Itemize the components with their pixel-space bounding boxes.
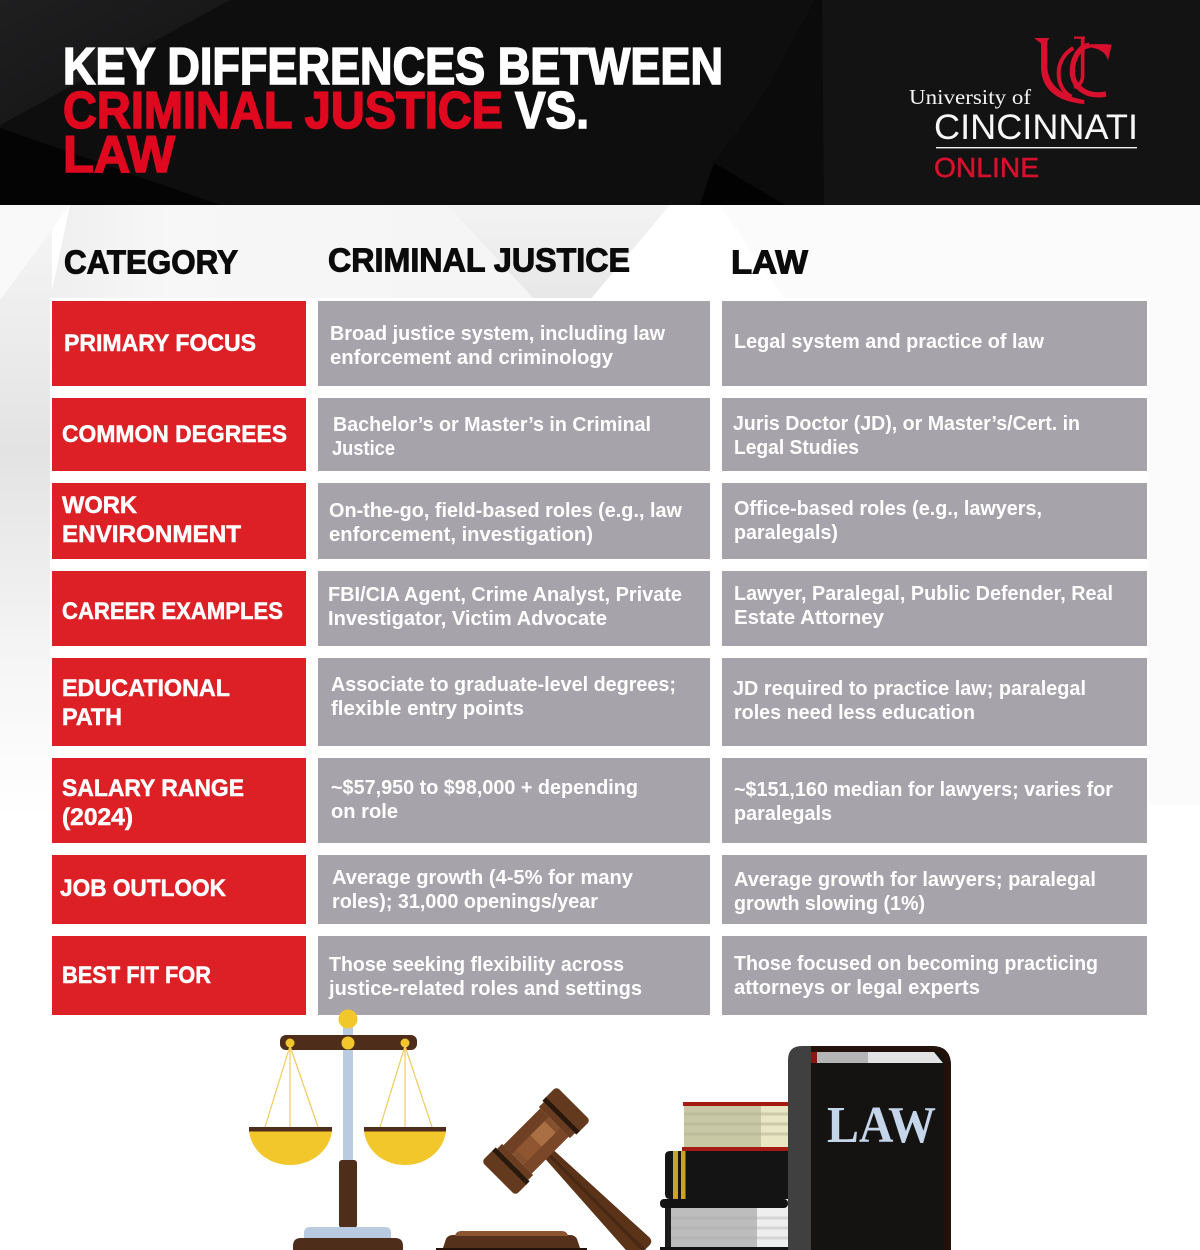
row: career examples <box>52 571 1147 646</box>
row: salary range: ~$57,950 to $98,000 + depending <box>331 776 638 799</box>
row: career examples: FBI/CIA Agent, Crime Analyst, Private <box>328 583 682 606</box>
book title: LAW: LAW <box>827 1097 936 1154</box>
row: work environment <box>52 483 1147 559</box>
icon: gavel <box>436 1087 682 1250</box>
icon: UC monogram <box>1034 38 1112 104</box>
logo text: Cincinnati: CINCINNATI <box>934 108 1138 147</box>
comparison table <box>52 301 1147 1015</box>
column headings: CATEGORY <box>64 244 238 280</box>
row: work environment: On-the-go, field-based roles (e.g., law <box>329 499 682 522</box>
row: best fit for: justice-related roles and settings <box>328 977 642 1000</box>
row: best fit for: attorneys or legal experts <box>734 976 980 999</box>
icon: law book <box>788 1046 951 1250</box>
title: CRIMINAL JUSTICE <box>63 82 503 140</box>
row: job outlook: JOB OUTLOOK <box>60 875 227 902</box>
row: common degrees: Justice <box>332 437 395 460</box>
row: educational path <box>52 658 1147 746</box>
row: best fit for <box>52 936 1147 1015</box>
row: best fit for: BEST FIT FOR <box>62 962 211 989</box>
row: common degrees: Bachelor’s or Master’s in Criminal <box>333 413 651 436</box>
row: educational path: PATH <box>62 704 122 731</box>
row: salary range: SALARY RANGE <box>62 775 244 802</box>
row: job outlook <box>52 855 1147 924</box>
title: VS. <box>515 82 589 140</box>
row: job outlook: Average growth for lawyers; paralegal <box>734 868 1096 891</box>
row: salary range: on role <box>331 800 398 823</box>
row: common degrees: COMMON DEGREES <box>62 421 287 448</box>
column headings <box>64 242 809 280</box>
row: work environment: ENVIRONMENT <box>62 521 241 548</box>
column headings: LAW <box>731 244 809 280</box>
row: job outlook: Average growth (4-5% for many <box>332 866 634 889</box>
row: career examples: CAREER EXAMPLES <box>62 598 283 625</box>
icon: scales of justice <box>249 1010 446 1250</box>
logo text: University of: University of <box>909 85 1031 109</box>
row: work environment: enforcement, investigation) <box>329 523 593 546</box>
row: career examples: Investigator, Victim Advocate <box>328 607 607 630</box>
row: common degrees: Legal Studies <box>734 436 859 459</box>
row: job outlook: growth slowing (1%) <box>734 892 925 915</box>
row: salary range: paralegals <box>734 802 832 825</box>
header band <box>0 0 1200 205</box>
logo text: Online: ONLINE <box>934 152 1039 183</box>
row: common degrees <box>52 398 1147 471</box>
title: LAW <box>63 126 176 184</box>
row: salary range <box>52 758 1147 843</box>
title: KEY DIFFERENCES BETWEEN <box>63 38 723 96</box>
row: work environment: paralegals) <box>734 521 838 544</box>
icon: stack of law books <box>660 1102 788 1250</box>
row: career examples: Lawyer, Paralegal, Public Defender, Real <box>734 582 1113 605</box>
row: salary range: (2024) <box>62 804 133 831</box>
row: best fit for: Those seeking flexibility across <box>329 953 624 976</box>
logo: University of Cincinnati Online <box>909 38 1138 183</box>
column headings: CRIMINAL JUSTICE <box>328 242 630 278</box>
row: primary focus: Legal system and practice of law <box>734 330 1044 353</box>
row: primary focus <box>52 301 1147 386</box>
row: primary focus: Broad justice system, including law <box>330 322 665 345</box>
row: work environment: WORK <box>62 492 138 519</box>
row: common degrees: Juris Doctor (JD), or Master’s/Cert. in <box>733 412 1080 435</box>
row: primary focus: PRIMARY FOCUS <box>64 330 256 357</box>
row: educational path: flexible entry points <box>331 697 524 720</box>
row: career examples: Estate Attorney <box>734 606 885 629</box>
row: job outlook: roles); 31,000 openings/year <box>332 890 598 913</box>
row: salary range: ~$151,160 median for lawyers; varies for <box>734 778 1113 801</box>
row: educational path: EDUCATIONAL <box>62 675 230 702</box>
title <box>63 38 723 184</box>
row: primary focus: enforcement and criminology <box>330 346 614 369</box>
row: educational path: roles need less education <box>734 701 975 724</box>
row: educational path: Associate to graduate-level degrees; <box>331 673 676 696</box>
row: best fit for: Those focused on becoming practicing <box>734 952 1098 975</box>
row: work environment: Office-based roles (e.g., lawyers, <box>734 497 1042 520</box>
row: educational path: JD required to practice law; paralegal <box>733 677 1086 700</box>
